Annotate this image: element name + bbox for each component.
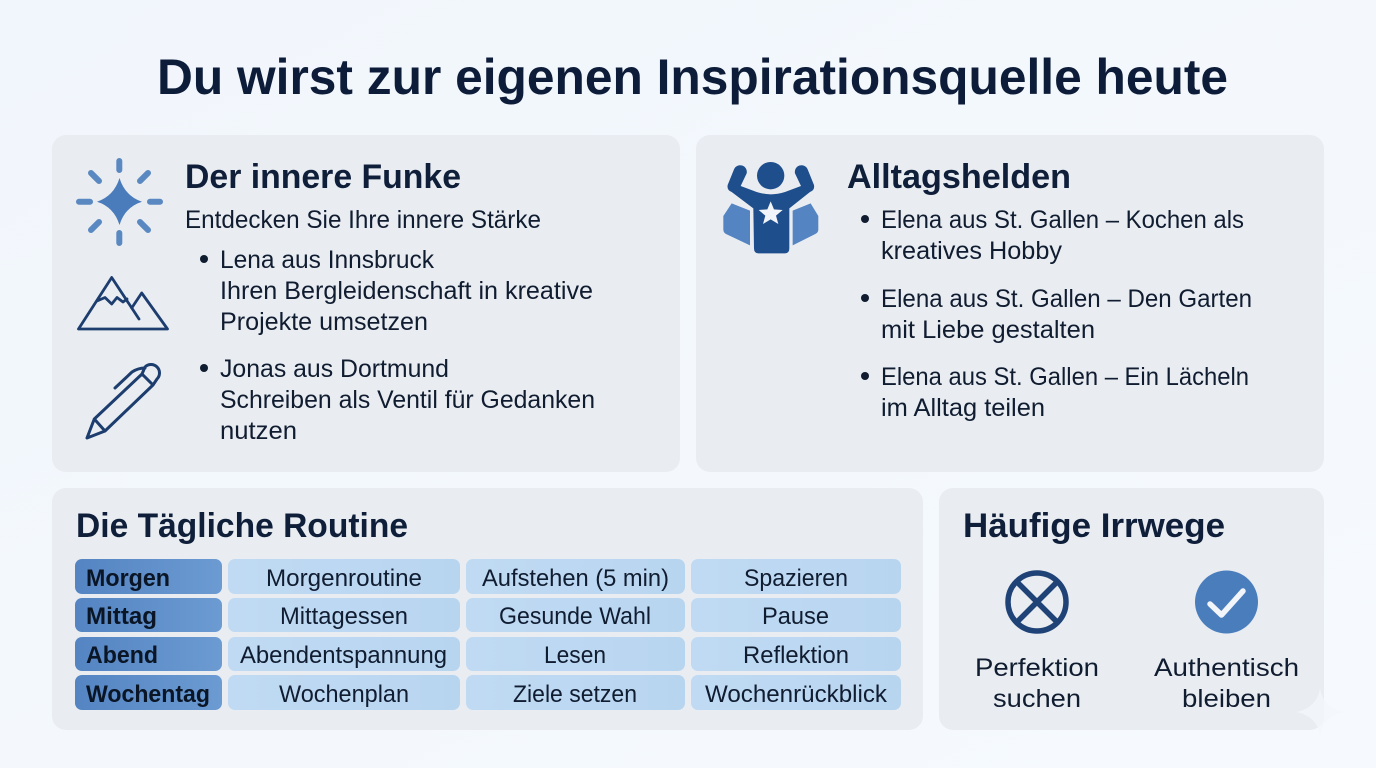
table: routine [75, 559, 901, 710]
row: Abend: Lesen [544, 642, 606, 669]
bullet: Garten: Elena aus St. Gallen – Den Garten [881, 285, 1252, 313]
row: Morgen: Aufstehen (5 min) [482, 565, 669, 592]
row: Mittag: Mittagessen [280, 603, 408, 630]
bullet: Lächeln [861, 363, 1249, 422]
row: Mittag [75, 598, 901, 632]
bullet: Jonas [200, 355, 595, 445]
icon: corner sparkle watermark [1296, 688, 1344, 736]
icon: cross circle [1008, 573, 1066, 631]
heading: Die Tägliche Routine [76, 507, 408, 545]
row: Wochentag: Wochentag [86, 681, 210, 708]
bullet: Lächeln: Elena aus St. Gallen – Ein Lächeln [881, 363, 1249, 391]
row: Mittag: Gesunde Wahl [499, 603, 651, 630]
bullet: Garten [861, 285, 1252, 344]
row: Wochentag [75, 675, 901, 710]
row: Wochentag: Wochenplan [279, 681, 409, 708]
label: Perfektion suchen: suchen [993, 685, 1081, 713]
label: Perfektion suchen [975, 654, 1099, 713]
bullet: Lena: Lena aus Innsbruck [220, 246, 434, 274]
panel: Alltagshelden [696, 135, 1324, 472]
icon: mountains [78, 278, 168, 329]
label: Authentisch bleiben: bleiben [1182, 685, 1271, 713]
label: Perfektion suchen: Perfektion [975, 654, 1099, 682]
label: Authentisch bleiben [1154, 654, 1299, 713]
title: Du wirst zur eigenen Inspirationsquelle heute [157, 49, 1228, 105]
bullet: Jonas: nutzen [220, 417, 297, 445]
bullet: Jonas: Jonas aus Dortmund [220, 355, 449, 383]
bullet: Kochen: kreatives Hobby [881, 237, 1063, 265]
heading: Alltagshelden [847, 158, 1071, 196]
row: Wochentag: Wochenrückblick [705, 681, 888, 708]
panel: Die Tägliche Routine [52, 488, 923, 730]
row: Morgen: Morgen [86, 565, 170, 592]
row: Mittag: Mittag [86, 603, 157, 630]
row: Abend: Abendentspannung [240, 642, 447, 669]
bullet: Lena: Projekte umsetzen [220, 308, 428, 336]
panel: Der innere Funke [52, 135, 680, 472]
icon: sparkle [79, 161, 160, 243]
icon: check circle [1195, 570, 1258, 634]
row: Morgen: Morgenroutine [266, 565, 422, 592]
icon: hero [723, 162, 818, 253]
bullet: Garten: mit Liebe gestalten [881, 316, 1095, 344]
row: Morgen: Spazieren [744, 565, 848, 592]
row: Abend: Reflektion [743, 642, 849, 669]
panel: Häufige Irrwege [939, 488, 1324, 730]
bullet: Lena [200, 246, 593, 336]
row: Abend [75, 637, 901, 671]
bullet: Jonas: Schreiben als Ventil für Gedanken [220, 386, 595, 414]
bullet: Kochen: Elena aus St. Gallen – Kochen als [881, 206, 1244, 234]
row: Mittag: Pause [762, 603, 829, 630]
row: Morgen [75, 559, 901, 594]
bullet: Kochen [861, 206, 1244, 265]
row: Wochentag: Ziele setzen [513, 681, 637, 708]
label: Authentisch bleiben: Authentisch [1154, 654, 1299, 682]
subheading: Entdecken Sie Ihre innere Stärke [185, 206, 541, 234]
row: Abend: Abend [86, 642, 158, 669]
heading: Der innere Funke [185, 158, 461, 196]
icon: pen [87, 365, 159, 438]
bullet: Lena: Ihren Bergleidenschaft in kreative [220, 277, 593, 305]
bullet: Lächeln: im Alltag teilen [881, 394, 1045, 422]
heading: Häufige Irrwege [963, 507, 1225, 545]
